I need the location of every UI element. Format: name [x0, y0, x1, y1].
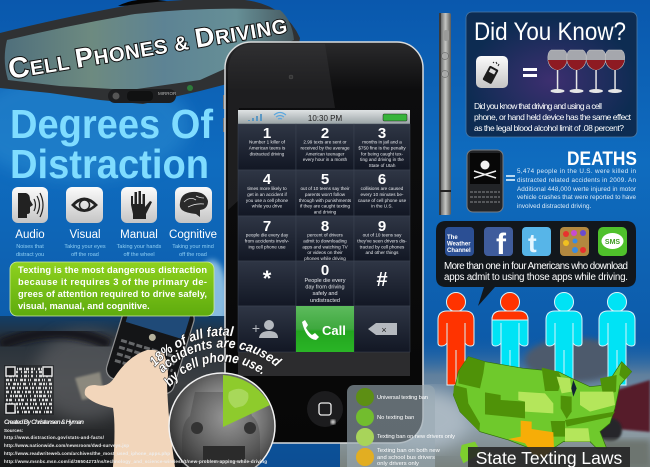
legend item: both new and school bus drivers: only drivers only [377, 461, 419, 467]
callout: texting is the most dangerous distraction: visual, manual, and cognitive. [18, 301, 150, 311]
panel: visual distraction [64, 187, 106, 258]
text: app usage statistic [444, 261, 628, 283]
mirror button label: MIRROR [158, 91, 177, 96]
credits and sources: http://www.msnbc.msn.com/id/36504273/ns/technology_and_science-wireless/t/new-problem-apping-while-driving [4, 459, 267, 464]
key 3: months in jail and a [362, 140, 402, 144]
panel: manual distraction: off the wheel [123, 252, 155, 258]
speech bubble: apps [436, 221, 636, 306]
legend: state texting laws [347, 385, 455, 467]
key 5: through with punishments [299, 198, 352, 203]
key 8 [302, 218, 349, 261]
key 9: tracted by cell phones [360, 244, 405, 249]
delete key [368, 323, 397, 335]
panel: manual distraction [117, 187, 162, 258]
key 9: they've seen drivers dis- [357, 238, 407, 243]
heading: degrees of distraction [10, 101, 213, 187]
status bar [238, 110, 410, 124]
key 0: safely and [312, 291, 338, 297]
key 8: apps and watching TV [302, 244, 349, 249]
key 1: American teens is [249, 145, 286, 150]
key 0: People die every [305, 278, 346, 284]
key 1: 1 [263, 125, 271, 142]
panel: manual distraction: Taking your hands [117, 244, 162, 250]
key 1: Number 1 killer of [249, 140, 286, 144]
key 4: while you drive [252, 204, 283, 209]
icon: hand [131, 191, 152, 219]
key 4 [246, 171, 289, 209]
key 3: for being caught tex- [361, 151, 403, 156]
legend item: new drivers: Texting ban on new drivers only [377, 434, 455, 440]
panel: cognitive distraction [169, 187, 217, 258]
key 6: every 10 minutes be- [361, 192, 404, 197]
panel: deaths: involved distracted driving. [517, 203, 591, 210]
key 5: out of 10 teens say their [300, 186, 350, 191]
key 2: 2 [321, 125, 329, 142]
key 6: 6 [378, 171, 386, 188]
key 4: you use a cell phone [246, 198, 289, 203]
legend item: no texting ban: No texting ban [377, 415, 414, 421]
key 3: 3 [378, 125, 386, 142]
key 7 [245, 218, 290, 249]
key 4: get in an accident if [247, 192, 288, 197]
panel: deaths: DEATHS [567, 148, 637, 170]
panel: deaths: vehicle crashes that were reported to have [517, 194, 636, 201]
key 5 [299, 171, 352, 215]
accident gauge: 18 percent [169, 373, 275, 467]
key 2: every hour in a month [303, 157, 348, 162]
add contact key: + [252, 320, 260, 336]
icon: four wine glasses [548, 50, 625, 93]
key 1 [249, 125, 286, 156]
key 5: and driving [314, 210, 337, 215]
legend item: both new and school bus drivers: and school bus drivers [377, 455, 435, 461]
key 3: State of Utah [369, 163, 396, 168]
key hash: # [376, 269, 388, 291]
credits and sources [4, 419, 267, 464]
credits and sources: http://www.nationwide.com/newsroom/dwd-surveys.jsp [4, 443, 129, 448]
key 0: 0 [321, 262, 329, 279]
key 9 [357, 218, 407, 255]
credits and sources: http://www.distraction.gov/stats-and-facts/ [4, 435, 105, 440]
key 2: received by the average [300, 145, 350, 150]
panel: deaths: distracted related accidents in 2009. An [517, 177, 636, 184]
key 1: distracted driving [250, 151, 285, 156]
call key [296, 306, 354, 352]
legend item: both new and school bus drivers [356, 448, 441, 467]
home button [307, 391, 343, 427]
panel: audio distraction: Noises that [16, 244, 44, 250]
icon: facebook [484, 227, 513, 261]
key 6: cause of cell phone use [358, 198, 407, 203]
key 8: admit to downloading [303, 238, 347, 243]
panel: deaths [517, 148, 637, 210]
text: app usage statistic: apps admit to using those apps while driving. [444, 272, 628, 283]
text: did you know body: Did you know that driving and using a cell [474, 101, 602, 111]
panel: cognitive distraction: off the road [179, 252, 207, 258]
icon: twitter: t [528, 228, 537, 258]
delete key: × [381, 325, 387, 335]
car interior photo [0, 316, 236, 467]
call key: Call [322, 323, 346, 338]
icon: twitter [522, 227, 551, 258]
key 4: times more likely to [247, 186, 287, 191]
key 8: or videos on their [307, 250, 343, 255]
credits and sources: http://www.readwriteweb.com/archives/the_most_used_iphone_apps.php [4, 451, 170, 456]
icon: smartphone with skull [467, 150, 503, 212]
panel: visual distraction: off the road [71, 252, 99, 258]
person 2 one quarter red [492, 292, 528, 385]
callout: 18% of all fatal accidents: accidents are caused [159, 340, 284, 373]
add contact key [252, 320, 278, 338]
panel: deaths: 5,474 people in the U.S. were killed in [517, 168, 636, 175]
text: did you know body: as the legal blood alcohol limit of .08 percent? [474, 123, 624, 133]
key 9: 9 [378, 218, 386, 235]
icon: weather channel [445, 227, 474, 256]
panel: did you know [466, 12, 637, 137]
keypad [238, 124, 410, 352]
rear-view mirror [0, 0, 300, 104]
text: app usage statistic: More than one in four Americans who download [444, 261, 628, 272]
text: did you know body: phone, or hand held device has the same effect [474, 112, 632, 122]
person 1 red [438, 292, 474, 385]
credits and sources: Sources: [4, 428, 24, 433]
heading: degrees of distraction: Degrees Of [10, 101, 213, 147]
side view of phone [439, 13, 451, 215]
panel: manual distraction: Manual [120, 229, 158, 241]
panel: cognitive distraction: Taking your mind [172, 244, 214, 250]
icon: facebook: f [496, 228, 507, 261]
key 8: phones while driving [304, 256, 346, 261]
panel: audio distraction: distract you [16, 252, 44, 258]
status bar: 10:30 PM [308, 114, 342, 123]
key 3: $750 fine is the penalty [358, 145, 406, 150]
icon: dots game [560, 227, 589, 256]
callout: texting is the most dangerous distraction: grees of attention required to drive safely, [18, 289, 207, 299]
hand holding smartphone [85, 292, 197, 467]
key 5: if they are caught texting [300, 204, 350, 209]
icon: sms: SMS [605, 239, 620, 246]
icon: eye [71, 198, 98, 212]
key 7: from accidents involv- [245, 238, 290, 243]
icon: speaking head [18, 193, 43, 218]
key 4: 4 [263, 171, 272, 188]
title: CELL PHONES & DRIVING [6, 8, 289, 86]
key 9: and other things [366, 250, 399, 255]
callout: 18% of all fatal accidents: 18% of all fatal [150, 326, 234, 368]
legend item: universal texting ban: Universal texting ban [377, 395, 428, 401]
key 0: day from driving [305, 285, 345, 291]
key 0 [305, 262, 346, 304]
panel: audio distraction: Audio [15, 229, 45, 241]
key 0: undistracted [310, 298, 340, 304]
panel: deaths: Additional 448,000 werte injured in motor [517, 186, 636, 193]
crash photo background [340, 335, 650, 467]
equals sign [523, 68, 537, 77]
icon: weather channel: The [447, 235, 458, 241]
panel: visual distraction: Taking your eyes [64, 244, 106, 250]
key 7: people die every day [246, 232, 289, 238]
icon: brain [180, 192, 208, 217]
callout: 18% of all fatal accidents: by cell phone use. [163, 352, 264, 387]
key 3: ting and driving in the [360, 157, 404, 162]
key star: * [263, 266, 272, 291]
map: state texting laws [453, 357, 632, 463]
panel: cognitive distraction: Cognitive [169, 229, 217, 241]
icon: cell phone [476, 56, 508, 88]
legend item: both new and school bus drivers: Texting ban on both new [377, 448, 441, 454]
people pictogram [438, 292, 635, 385]
text: did you know body [474, 101, 632, 133]
key 7: 7 [263, 218, 271, 235]
callout: 18% of all fatal accidents [150, 326, 284, 387]
key 6: in the U.S. [371, 204, 393, 209]
key 8: percent of drivers [307, 232, 343, 238]
key 5: parents won't follow [305, 192, 346, 197]
heading: did you know: Did You Know? [474, 18, 626, 46]
panel: visual distraction: Visual [69, 229, 101, 241]
QR code [4, 365, 54, 415]
heading: degrees of distraction: Distraction [10, 141, 209, 187]
key 2: 2.99 texts are sent or [303, 140, 347, 144]
key 6 [358, 171, 407, 209]
callout: texting is the most dangerous distraction: Texting is the most dangerous distraction [18, 265, 207, 275]
icon: sms [598, 227, 627, 256]
panel: audio distraction [12, 187, 48, 258]
person 4 cyan [599, 292, 635, 385]
icon: weather channel: Channel [447, 248, 471, 254]
phone [223, 42, 423, 443]
key 3 [358, 125, 406, 168]
key 2 [300, 125, 350, 162]
key 9: out of 10 teens say [363, 232, 402, 238]
person 3 cyan [546, 292, 582, 385]
icon: weather channel: Weather [447, 242, 471, 248]
key 2: American teenager [306, 151, 345, 156]
key 6: collisions are caused [361, 186, 404, 191]
callout: texting is the most dangerous distraction: because it requires 3 of the primary de- [18, 277, 207, 287]
equals sign [506, 175, 515, 181]
key 5: 5 [321, 171, 329, 188]
key 7: ing cell phone use [248, 244, 286, 249]
callout: texting is the most dangerous distraction [10, 262, 214, 316]
credits and sources: Created By Christensen & Hyman [4, 419, 84, 426]
key 8: 8 [321, 218, 329, 235]
